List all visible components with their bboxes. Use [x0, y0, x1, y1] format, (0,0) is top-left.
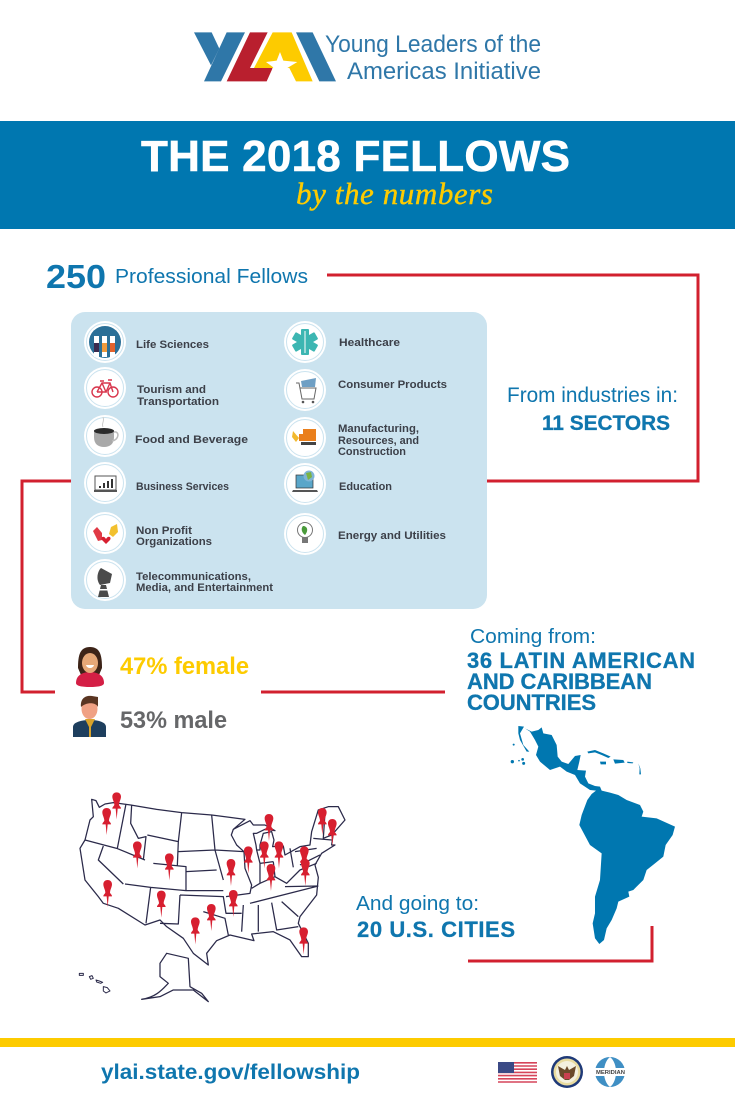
sector labels: left column: Food and Beverage — [135, 434, 248, 446]
icon: hands and heart — [93, 524, 118, 544]
icon: excavator — [292, 429, 316, 445]
sector labels: right column: Education — [339, 481, 392, 493]
sectors callout: 11 SECTORS — [542, 412, 670, 435]
logo — [194, 31, 541, 85]
icon: US flag — [498, 1062, 537, 1083]
connector lines: gender — [22, 481, 445, 692]
sector labels: left column: Tourism and — [137, 384, 206, 396]
sector labels: left column — [135, 339, 273, 594]
sector labels: left column: Non Profit — [136, 525, 192, 537]
title: THE 2018 FELLOWS — [141, 132, 570, 181]
sector labels: right column: Resources, and — [338, 435, 419, 447]
icon: life sciences — [89, 326, 121, 358]
cities callout: And going to: — [356, 893, 479, 915]
sector labels: left column: Organizations — [136, 536, 212, 548]
icon: Meridian logo — [595, 1057, 625, 1087]
sector labels: right column: Construction — [338, 446, 406, 458]
logo wordmark: Young Leaders of the — [325, 31, 541, 58]
sector labels: left column: Telecommunications, — [136, 571, 251, 583]
icon: shopping cart — [296, 378, 316, 403]
sector labels: right column: Consumer Products — [338, 379, 447, 391]
countries callout: AND CARIBBEAN — [467, 669, 652, 694]
countries callout: Coming from: — [470, 626, 596, 648]
icon: medical star — [292, 329, 318, 355]
map: Latin America — [511, 726, 675, 944]
sector labels: right column: Healthcare — [339, 337, 400, 349]
panel: sectors — [71, 312, 487, 609]
icon: light bulb — [298, 522, 312, 543]
logo wordmark — [325, 31, 541, 85]
icon: laptop and globe — [292, 470, 318, 492]
sector labels: left column: Business Services — [136, 481, 229, 493]
icon: telecom tower — [97, 568, 112, 597]
sector labels: right column — [338, 337, 447, 542]
logo wordmark: Americas Initiative — [347, 58, 541, 85]
icon: woman — [76, 647, 104, 687]
cities callout — [356, 893, 515, 942]
fellows count: Professional Fellows — [115, 266, 308, 288]
icon: State Department seal — [551, 1056, 583, 1088]
map: United States with city pins — [79, 792, 345, 1002]
sector labels: left column: Media, and Entertainment — [136, 582, 273, 594]
icon: bicycle — [92, 380, 118, 397]
gender stat: female: 47% female — [120, 653, 249, 680]
gender stat: male: 53% male — [120, 707, 227, 734]
sector labels: left column: Life Sciences — [136, 339, 209, 351]
connector line: cities — [468, 926, 652, 961]
title banner — [0, 121, 735, 229]
footer url: ylai.state.gov/fellowship — [101, 1061, 360, 1084]
sector labels: right column: Manufacturing, — [338, 423, 419, 435]
sectors callout — [507, 384, 678, 435]
countries callout: 36 LATIN AMERICAN — [467, 648, 695, 673]
icon: coffee cup — [94, 417, 118, 447]
sector labels: right column: Energy and Utilities — [338, 530, 446, 542]
state outlines — [79, 799, 345, 1002]
connector lines: sectors — [327, 275, 698, 481]
countries callout — [467, 626, 695, 715]
icon rings — [84, 321, 326, 601]
sector labels: left column: Transportation — [137, 396, 219, 408]
sectors callout: From industries in: — [507, 384, 678, 407]
icon: Meridian logo: MERIDIAN — [596, 1070, 625, 1076]
fellows count — [46, 258, 308, 295]
icon: business chart — [94, 476, 117, 492]
logo mark: YLAI — [194, 32, 336, 81]
cities callout: 20 U.S. CITIES — [357, 917, 515, 942]
fellows count: 250 — [46, 258, 106, 295]
icon: man — [73, 696, 106, 737]
city pins — [102, 792, 337, 954]
countries callout: COUNTRIES — [467, 690, 596, 715]
footer bar — [0, 1038, 735, 1047]
subtitle: by the numbers — [296, 176, 493, 211]
